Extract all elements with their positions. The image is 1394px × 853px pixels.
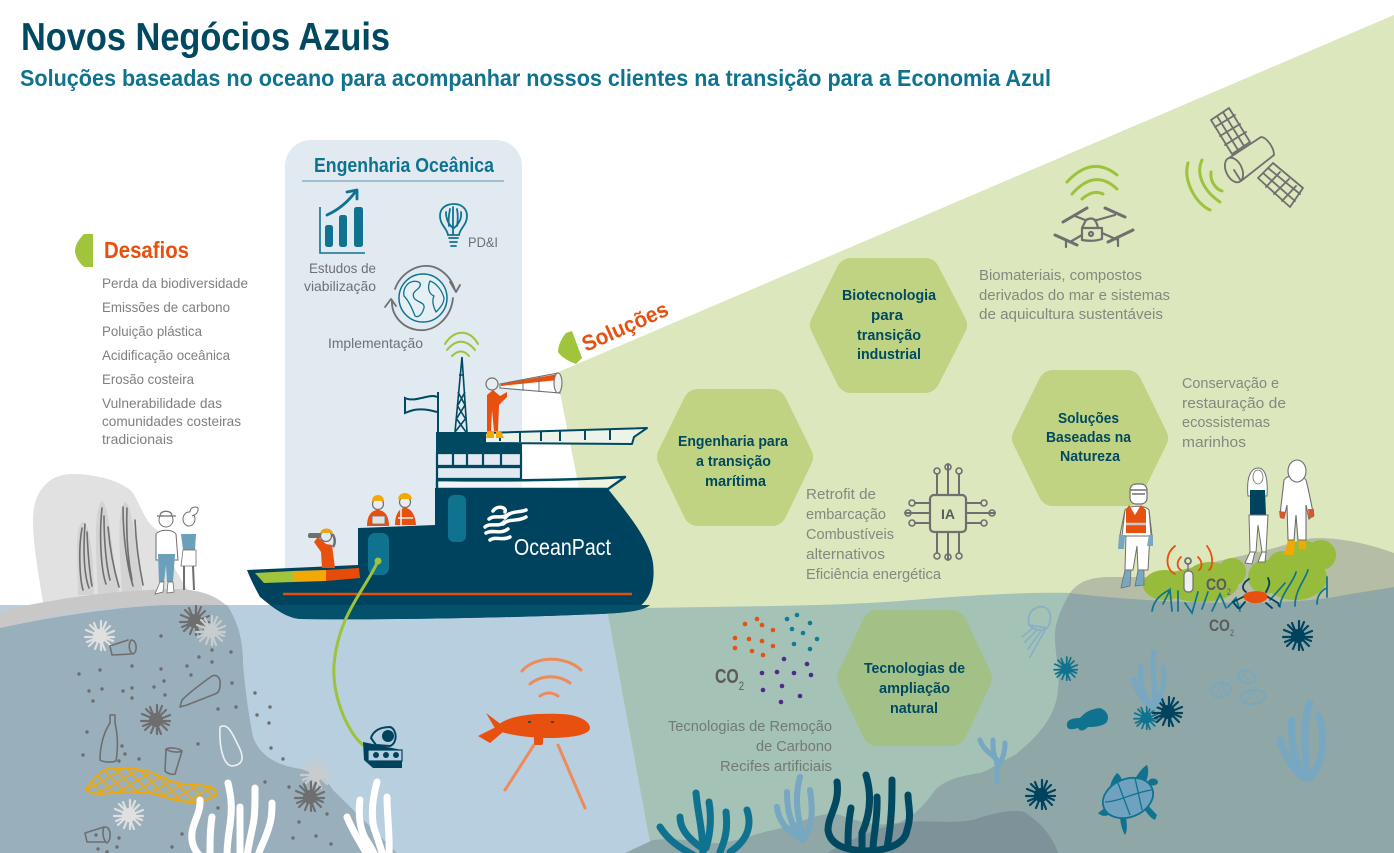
ponytail [332, 534, 335, 547]
cap and glasses [1130, 490, 1147, 494]
purple dots [760, 657, 813, 704]
icon: AI chip [905, 464, 995, 560]
hexagon: Tecnologias de ampliação natural [852, 625, 977, 731]
body [395, 508, 416, 525]
urchin dark middle [141, 705, 170, 734]
water: sea inside beam [607, 587, 1394, 853]
hexagon label: Biotecnologia [842, 287, 937, 363]
label: CO2 main: 2 [739, 679, 744, 693]
text block: challenges list: Acidificação oceânica [102, 347, 230, 363]
icon: mangrove roots [1152, 570, 1327, 613]
colour stripe: orange [326, 568, 360, 581]
icon: white plastic bag [220, 726, 242, 766]
text block: conservação: restauração de [1182, 396, 1286, 412]
head [1148, 778, 1158, 786]
detail marks [528, 721, 554, 723]
arm outline [1120, 510, 1151, 535]
payload box [1082, 219, 1102, 241]
text block: challenges list: Vulnerabilidade das [102, 395, 222, 411]
chip label: IA [941, 506, 955, 522]
urchin dark right [295, 782, 324, 811]
bottle lying [180, 675, 220, 707]
camera housing [371, 727, 396, 746]
text block: challenges list: Erosão costeira [102, 371, 194, 387]
land: grey hill with kelp silhouette [33, 474, 190, 603]
cycle arrows [385, 266, 460, 330]
label: Estudos de viabilização: Estudos de [309, 260, 376, 276]
boots [486, 431, 504, 438]
icon: satellite [1187, 108, 1303, 210]
arrow [327, 190, 357, 215]
body [367, 510, 389, 526]
text block: retrofit: Retrofit de [806, 487, 876, 503]
man's shoes [155, 582, 174, 594]
net body [87, 768, 216, 803]
icon: light coral centre [1134, 652, 1164, 708]
label: CO2 main: CO [715, 666, 745, 688]
lower roof line [437, 477, 625, 489]
legs and body [487, 390, 507, 431]
binoculars [308, 533, 321, 538]
icon: crew with binoculars [308, 528, 335, 568]
rail posts [500, 430, 610, 442]
signal arcs [1067, 166, 1117, 199]
urchin light bottom [114, 800, 143, 829]
urchin light top [196, 616, 225, 645]
porthole left [368, 533, 389, 575]
water: light blue sea [0, 605, 652, 853]
helmet [398, 493, 412, 499]
text block: remoção de carbono [668, 719, 832, 775]
icon: light blue coral bottom [777, 777, 812, 840]
hull lower band [272, 605, 650, 619]
heading: Engenharia Oceânica: Engenharia Oceânica [314, 154, 495, 177]
sonar pod [534, 736, 543, 745]
shell [1097, 771, 1159, 825]
head [320, 530, 332, 542]
icon: fish [1067, 708, 1108, 731]
icon: white coral right [347, 782, 389, 853]
upper deck platform [485, 428, 647, 444]
woman's top [181, 534, 196, 550]
panel [368, 750, 402, 761]
icon: white coral left [192, 783, 272, 853]
hexagon label: Engenharia para a transição marítima: marítima [705, 473, 767, 490]
helmet [372, 495, 384, 501]
blob highlights [77, 501, 143, 595]
hexagon label: Engenharia para a transição marítima: Engenharia para [678, 433, 789, 450]
hexagon: Soluções Baseadas na Natureza [1027, 385, 1153, 491]
icon: teal coral bottom [660, 793, 749, 853]
arms and frame [1066, 215, 1118, 247]
icon: sea turtle [1097, 765, 1159, 835]
overall [1280, 476, 1314, 540]
sensor body [1184, 571, 1193, 592]
drone body [1055, 208, 1133, 247]
woman's legs [184, 566, 194, 590]
shell plates [1105, 778, 1152, 815]
label: PD&I: PD&I [468, 234, 498, 250]
teal urchin middle [1134, 706, 1157, 729]
icon: lookout with telescope [486, 373, 562, 438]
seabed: polluted left hill [0, 605, 397, 853]
text block: remoção de carbono: de Carbono [756, 739, 832, 755]
hexagon label: Tecnologias de ampliação natural: ampliação [879, 680, 950, 697]
cable: green ROV tether [334, 561, 378, 745]
text block: challenges list: comunidades costeiras [102, 413, 241, 429]
text block: retrofit: alternativos [806, 547, 885, 563]
icon: globe with cycle arrows [385, 266, 460, 330]
head [372, 498, 384, 510]
label: CO2 on mangrove: 2 [1227, 587, 1231, 597]
windows frame [437, 453, 521, 479]
colour stripe: yellow [293, 570, 326, 582]
hexagon label: Biotecnologia: industrial [857, 346, 921, 363]
icon: mangrove bushes [1143, 540, 1336, 602]
icon: small light coral [980, 740, 1005, 782]
icon: AUV submarine [478, 713, 590, 745]
torso [1122, 506, 1152, 536]
hexagon label: Tecnologias de ampliação natural: Tecnologias de [864, 660, 965, 677]
label: CO2 below mangrove: 2 [1230, 628, 1234, 638]
urchin light right [301, 759, 330, 788]
man's shirt [156, 530, 178, 560]
icon: ROV camera [363, 727, 402, 768]
icon: crab [1233, 578, 1279, 608]
icon: ship mast [455, 357, 467, 432]
head [486, 378, 498, 390]
hexagon label: Tecnologias de ampliação natural: natural [890, 700, 938, 717]
kelp strokes [80, 507, 143, 590]
text block: conservação [1182, 376, 1286, 451]
boots [1284, 538, 1306, 555]
teal urchin top [1054, 657, 1077, 680]
icon: dark coral bottom [828, 775, 910, 851]
shoes [1245, 552, 1266, 564]
panel: solutions light beam [556, 15, 1394, 630]
text block: retrofit [806, 487, 942, 583]
chart: CO2 dots [733, 613, 819, 704]
grey blob [33, 474, 190, 603]
land: right shore [1070, 538, 1394, 603]
text block: retrofit: Eficiência energética [806, 567, 942, 583]
urchin light left [85, 621, 114, 650]
hexagon label: Soluções Baseadas na Natureza: Baseadas na [1046, 429, 1132, 446]
legs [1249, 515, 1268, 552]
text block: remoção de carbono: Tecnologias de Remoção [668, 719, 832, 735]
icons: urchins on right seabed [1026, 621, 1312, 809]
land: left shore [0, 589, 227, 628]
hexagon label: Biotecnologia: transição [857, 327, 921, 344]
text block: challenges list [102, 275, 248, 447]
icon: couple on left shore [155, 507, 198, 594]
porthole right [448, 495, 466, 542]
sensor top [1185, 558, 1191, 564]
cup middle [165, 748, 182, 774]
icons: sea urchins on left seabed [85, 606, 330, 829]
hood and face [1288, 460, 1306, 482]
globe [399, 274, 447, 322]
hull orange line [283, 593, 632, 595]
head [400, 496, 410, 508]
hexagon label: Engenharia para a transição marítima [678, 433, 789, 490]
icon: person with orange vest [1118, 484, 1153, 588]
text block: biomateriais: derivados do mar e sistemas [979, 288, 1170, 304]
text block: conservação: ecossistemas [1182, 415, 1270, 431]
icon: person in white overalls [1279, 460, 1314, 555]
dark urchin middle [1153, 697, 1182, 726]
icon: sensor buoy with signal [1167, 546, 1212, 592]
t-shirt [1250, 490, 1266, 515]
orange signal arcs [1167, 546, 1212, 574]
title: Novos Negócios Azuis [21, 16, 390, 59]
vest [1126, 505, 1146, 533]
cup bottom [85, 827, 110, 843]
text block: biomateriais: de aquicultura sustentáveis [979, 307, 1163, 323]
hexagon label: Tecnologias de ampliação natural [864, 660, 965, 717]
shell [1243, 591, 1268, 603]
telescope [500, 373, 562, 393]
helmet [320, 528, 333, 533]
icon: crew member with tablet [367, 495, 389, 526]
head [1130, 484, 1147, 504]
label: Implementação: Implementação [328, 335, 423, 351]
text block: remoção de carbono: Recifes artificiais [720, 759, 832, 775]
man's jeans [158, 554, 175, 582]
icon: ghost fishing net [87, 768, 216, 803]
propellers [1055, 208, 1133, 245]
dark urchin right [1283, 621, 1312, 650]
cable end [374, 558, 382, 564]
icon: ship flag [405, 392, 438, 432]
bottle standing [100, 715, 117, 762]
panel: Engenharia Oceânica background [285, 140, 522, 615]
woman's head and hair [183, 512, 195, 526]
cup top [110, 640, 136, 655]
subtitle: Soluções baseadas no oceano para acompanhar nossos clientes na transição para a Economia Azul [20, 65, 1051, 91]
hexagon label: Biotecnologia: para [871, 307, 904, 324]
continents [404, 281, 444, 317]
text block: conservação: marinhos [1182, 435, 1246, 451]
dark urchin bottom [1026, 780, 1055, 809]
icon: clam shells [1210, 668, 1266, 706]
trousers [1125, 534, 1150, 570]
tablet [372, 516, 385, 524]
text block: retrofit: Combustíveis [806, 527, 894, 543]
icon: crew member with vest [395, 493, 416, 525]
hexagon label: Soluções Baseadas na Natureza: Soluções [1058, 410, 1119, 427]
legs and claws [1233, 578, 1279, 608]
label: Estudos de viabilização [304, 260, 376, 294]
icon: antenna signal arcs [445, 333, 478, 356]
text block: challenges list: tradicionais [102, 431, 173, 447]
orange dots [733, 617, 775, 657]
hexagon label: Engenharia para a transição marítima: a transição [696, 453, 771, 470]
teal dots [785, 613, 819, 651]
body [314, 537, 335, 568]
icon: light bulb [440, 204, 467, 246]
seabed: deep bottom [827, 811, 1058, 853]
solar panels and body [1211, 108, 1303, 207]
icons: plastic waste [85, 640, 220, 843]
circuit lines [905, 464, 995, 560]
icon: AUV legs [505, 745, 585, 808]
hexagon: Engenharia para a transição marítima [672, 404, 798, 511]
lens [382, 730, 394, 742]
icon: drone [1055, 166, 1133, 247]
buttons [373, 752, 379, 758]
text block: biomateriais: Biomateriais, compostos [979, 268, 1142, 284]
heading: Desafios: Desafios [104, 237, 189, 263]
hull [247, 488, 654, 619]
label: CO2 on mangrove: CO [1206, 575, 1232, 594]
icon: AUV signal arcs [522, 659, 581, 696]
icon: Soluções tab [558, 331, 582, 364]
hexagon: Biotecnologia [825, 273, 952, 378]
text block: biomateriais [979, 268, 1170, 323]
axes [320, 207, 365, 253]
tail fins [478, 713, 503, 743]
logo: OceanPact wordmark: OceanPact [514, 534, 612, 560]
hair [1248, 468, 1267, 496]
hexagon label: Soluções Baseadas na Natureza [1046, 410, 1132, 465]
icon: bar chart with arrow [320, 190, 365, 253]
icon: dark hill right [625, 587, 1394, 853]
gloves [1118, 535, 1153, 549]
gloves [1279, 509, 1314, 519]
text block: challenges list: Emissões de carbono [102, 299, 230, 315]
icon: jellyfish [1022, 607, 1050, 657]
icon: woman in navy t-shirt [1245, 468, 1268, 564]
text block: challenges list: Poluição plástica [102, 323, 202, 339]
face [1253, 470, 1263, 484]
label: CO2 below mangrove: CO [1209, 616, 1234, 635]
icon: big light coral [1280, 703, 1322, 778]
icon: research ship [247, 428, 654, 619]
body [363, 742, 402, 768]
flippers [1098, 765, 1157, 835]
text block: retrofit: embarcação [806, 507, 886, 523]
heading: Soluções: Soluções [578, 296, 672, 357]
hexagon label: Biotecnologia: Biotecnologia [842, 287, 937, 304]
chip body [930, 495, 966, 532]
boots [1121, 570, 1144, 588]
text block: challenges list: Perda da biodiversidade [102, 275, 248, 291]
bars [325, 225, 333, 247]
label: Estudos de viabilização: viabilização [304, 278, 376, 294]
signal arcs [1187, 160, 1222, 210]
urchin dark top [180, 606, 209, 635]
line nodes [905, 464, 995, 560]
man's head and hat [159, 513, 173, 527]
woman's skirt [181, 550, 196, 566]
colour stripe: green [255, 571, 293, 583]
text block: conservação: Conservação e [1182, 376, 1279, 392]
scatter: pollution particles [77, 634, 333, 853]
hexagon label: Soluções Baseadas na Natureza: Natureza [1060, 448, 1121, 465]
vest stripes [398, 509, 413, 525]
logo: OceanPact waves [485, 507, 526, 540]
upper cabin [436, 432, 522, 453]
hull [498, 714, 590, 738]
icon: Desafios tab [75, 234, 93, 267]
